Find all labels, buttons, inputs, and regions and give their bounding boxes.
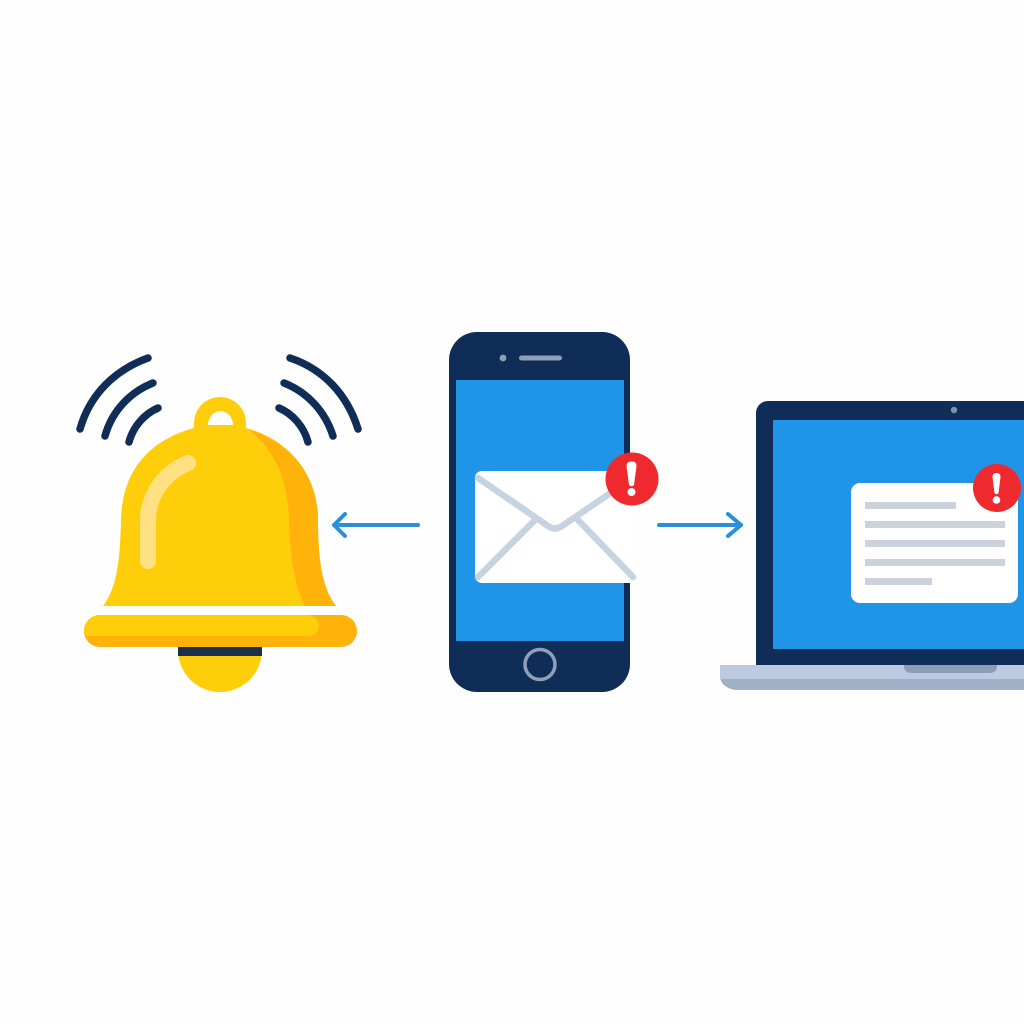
bell rim [84,615,357,647]
arrow: phone to bell [334,514,418,536]
bell body [103,428,336,606]
envelope [475,471,633,583]
phone camera [500,355,506,361]
sound waves left [80,358,158,442]
bell body shadow [248,429,336,606]
icon: laptop [720,401,1024,690]
laptop lid [756,401,1024,666]
sound waves right [279,358,358,442]
phone home button [525,650,555,680]
bell clapper [178,647,262,692]
arrow: phone to laptop [659,514,741,536]
phone speaker [519,356,562,360]
icon: ringing bell [80,358,358,692]
phone screen [456,380,624,641]
laptop base [720,665,1024,690]
phone body [449,332,630,692]
bell loop [194,397,246,432]
laptop camera [951,407,957,413]
notification card [851,483,1018,603]
alert badge: laptop [973,464,1021,512]
bell highlight [148,463,188,561]
alert badge: phone [606,452,658,506]
laptop screen [773,420,1024,649]
icon: smartphone [449,332,658,692]
